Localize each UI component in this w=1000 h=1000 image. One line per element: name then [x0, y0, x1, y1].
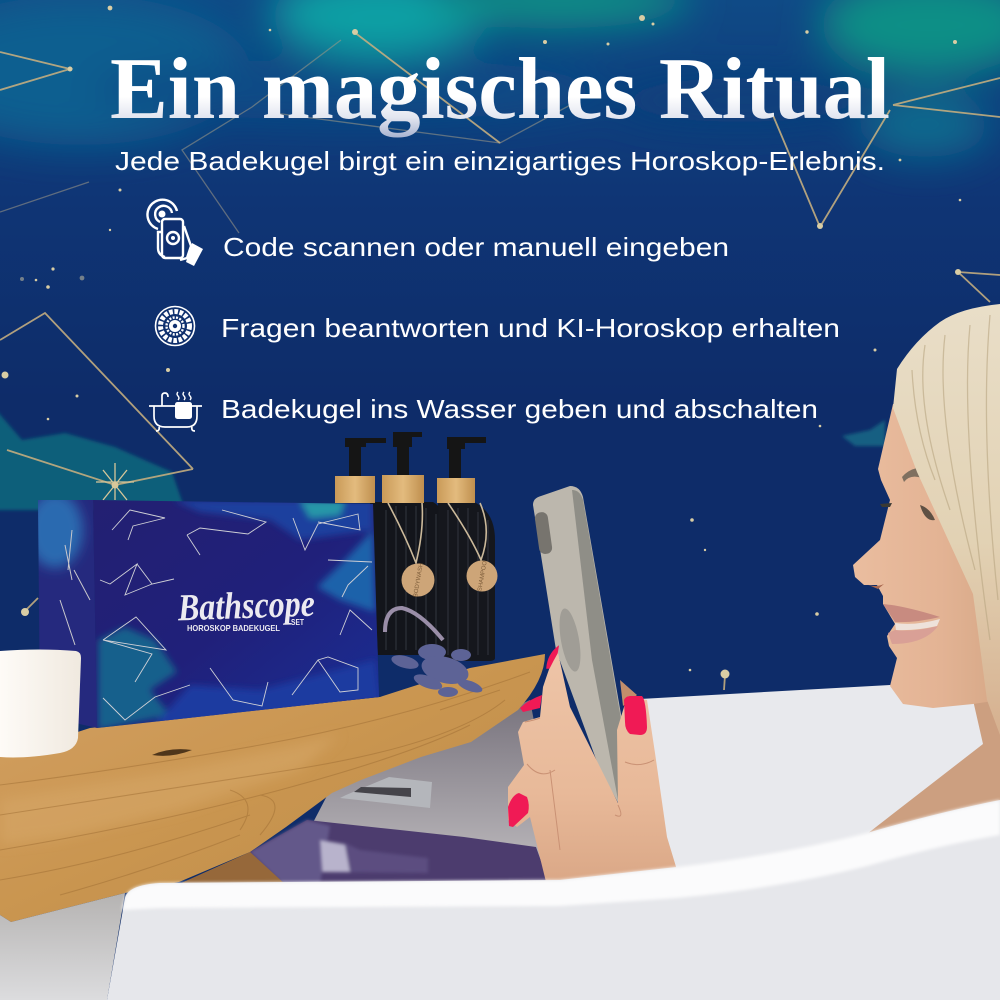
bottle pumps [345, 432, 486, 478]
box side flap [38, 500, 97, 728]
tub outer shadow [0, 893, 125, 1000]
smartphone [533, 486, 622, 806]
neck and shoulder [867, 690, 1000, 834]
dim constellation lines behind the title [0, 40, 574, 233]
wooden tags: BODYWASH [413, 563, 425, 598]
icon: bathtub with steam [149, 392, 202, 431]
wood reflection [179, 852, 286, 885]
step 2 text: Fragen beantworten und KI-Horoskop erhalten [221, 313, 840, 343]
box logo: Bathscope [176, 583, 316, 629]
step 2: answer questions [156, 306, 840, 346]
box clouds [98, 500, 380, 730]
bottles [335, 432, 498, 661]
hand holding phone [508, 647, 680, 890]
face [853, 404, 1000, 708]
lavender bunch [385, 608, 484, 697]
tub inner back wall [640, 685, 1000, 890]
finger creases [525, 718, 654, 850]
wooden shelf [0, 654, 545, 922]
bottle ribs [386, 506, 488, 655]
step 3 text: Badekugel ins Wasser geben und abschalten [221, 394, 818, 424]
bottle bodies [370, 502, 447, 655]
teal cloud: left [0, 403, 185, 510]
step 1: scan code [147, 200, 729, 266]
purple water [250, 820, 550, 886]
wooden tags: SHAMPOO [477, 560, 489, 592]
woman in bathtub [853, 304, 1000, 834]
wood knot [152, 749, 192, 756]
teal cloud: right small [842, 420, 885, 446]
step 3: bath ball in water [149, 392, 818, 431]
gold star burst [96, 463, 134, 500]
wooden tags [402, 560, 498, 598]
icon: hand holding phone with scan rings [147, 200, 203, 266]
wood highlight [0, 735, 340, 845]
gold constellation lines [0, 32, 1000, 690]
box logo: SET [291, 617, 305, 627]
hair [893, 304, 1000, 735]
palm behind thumb [620, 680, 637, 706]
product box [27, 492, 383, 730]
candle cup [0, 650, 81, 758]
overflow drain [340, 777, 432, 808]
strings [388, 503, 486, 563]
step 1 text: Code scannen oder manuell eingeben [223, 232, 729, 262]
mouth and eye [866, 468, 940, 644]
gold stars and dots [2, 6, 961, 679]
tub front rim [107, 800, 1000, 1000]
box constellations [100, 510, 372, 720]
water reflection [320, 840, 428, 873]
wood grain [0, 672, 530, 895]
hair strands [912, 315, 998, 640]
box logo: HOROSKOP BADEKUGEL [187, 623, 280, 633]
teal clouds: top [0, 0, 1000, 157]
icon: zodiac wheel [156, 306, 194, 346]
subtitle: Jede Badekugel birgt ein einzigartiges Horoskop-Erlebnis. [115, 146, 885, 176]
bamboo caps [335, 476, 375, 503]
nails [508, 647, 647, 827]
tub interior with water [179, 700, 565, 886]
title: Ein magisches Ritual [110, 41, 890, 138]
box front [93, 500, 383, 730]
